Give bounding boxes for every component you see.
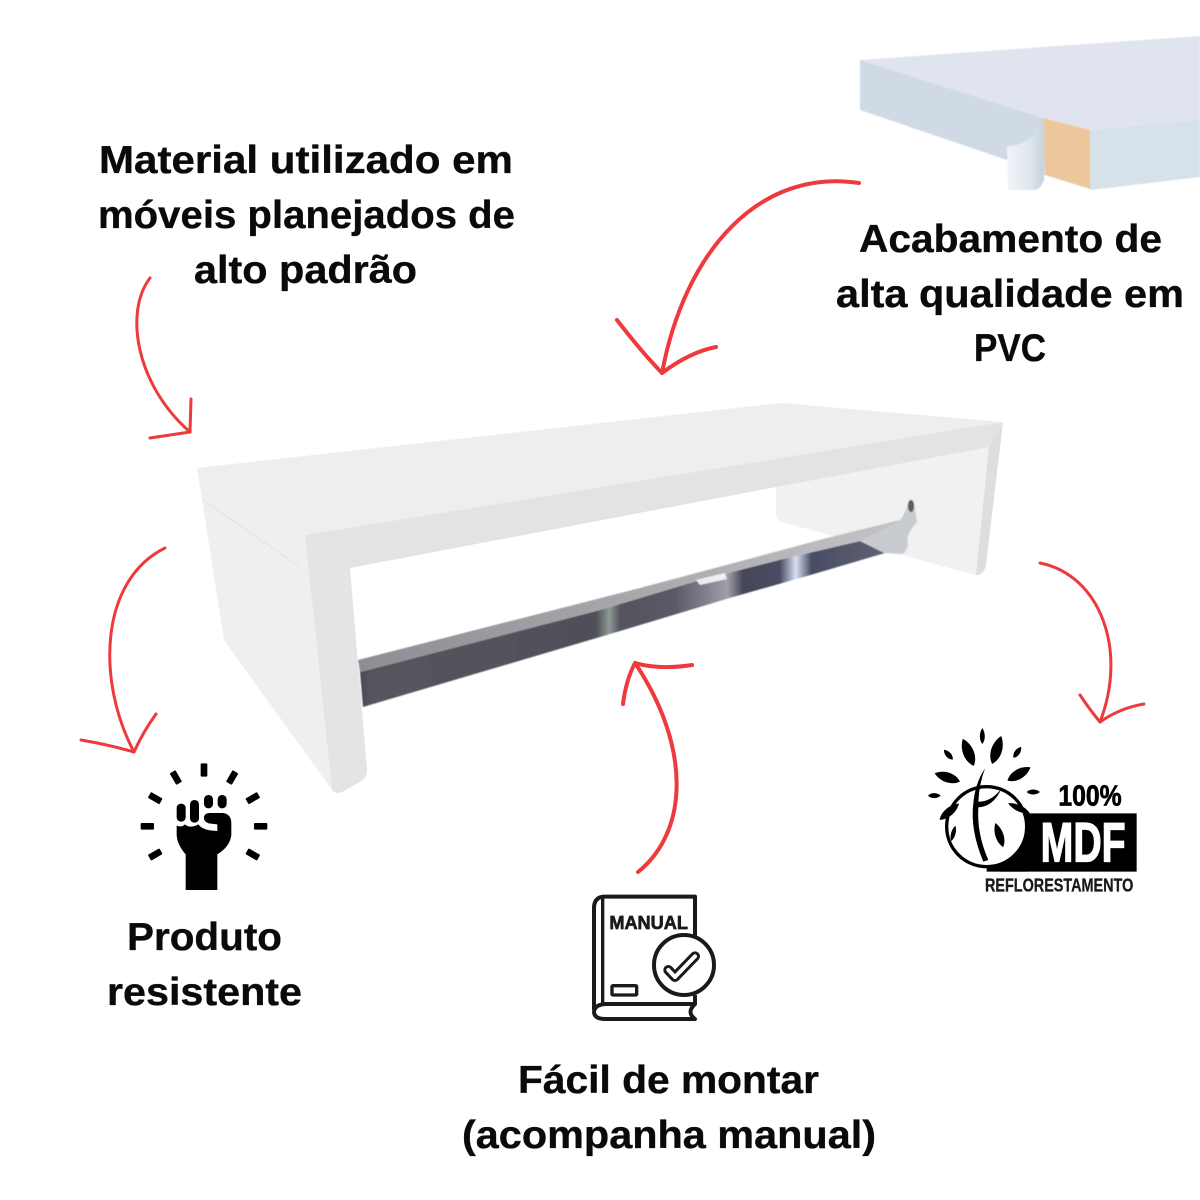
heading: material: alto padrão: [194, 249, 417, 292]
icon: 100% MDF reflorestamento seal: MDF: [1041, 812, 1126, 874]
shelf left side: [197, 468, 332, 790]
icon: 100% MDF reflorestamento seal: 100%: [1058, 780, 1122, 812]
heading: material: móveis planejados de: [98, 194, 515, 237]
heading: acabamento: PVC: [974, 327, 1046, 370]
label: facil de montar: (acompanha manual): [462, 1114, 876, 1157]
heading: acabamento: Acabamento de: [859, 218, 1162, 261]
arrow: material to shelf: [137, 278, 191, 438]
shelf side crease: [203, 500, 300, 567]
heading: acabamento: [836, 218, 1184, 370]
photo: PVC edge banding detail: [860, 36, 1200, 190]
arrow: shelf to resistant: [81, 548, 165, 752]
label: produto resistente: resistente: [107, 971, 302, 1014]
label: produto resistente: Produto: [127, 916, 282, 959]
heading: acabamento: alta qualidade em: [836, 273, 1184, 316]
shelf back leg: [776, 440, 989, 575]
hanging rail: [358, 500, 917, 707]
shelf top surface: [197, 403, 1003, 535]
icon: fist: [141, 763, 267, 890]
product: white shelf with rail: [197, 403, 1003, 793]
label: facil de montar: Fácil de montar: [518, 1059, 819, 1102]
heading: material: [98, 139, 515, 292]
icon: manual book: MANUAL: [609, 912, 688, 933]
shelf right outer edge: [976, 422, 1003, 575]
label: facil de montar: [462, 1059, 876, 1157]
label: produto resistente: [107, 916, 302, 1014]
heading: material: Material utilizado em: [99, 139, 513, 182]
arrow: manual to shelf: [623, 663, 692, 872]
shelf front leg: [305, 535, 367, 793]
shelf front band: [305, 422, 1003, 568]
arrow: finish to shelf: [617, 181, 859, 373]
icon: 100% MDF reflorestamento seal: [928, 728, 1137, 895]
arrow: shelf to MDF: [1040, 563, 1144, 722]
icon: 100% MDF reflorestamento seal: REFLORESTAMENTO: [985, 874, 1133, 895]
icon: manual book: [594, 897, 714, 1019]
